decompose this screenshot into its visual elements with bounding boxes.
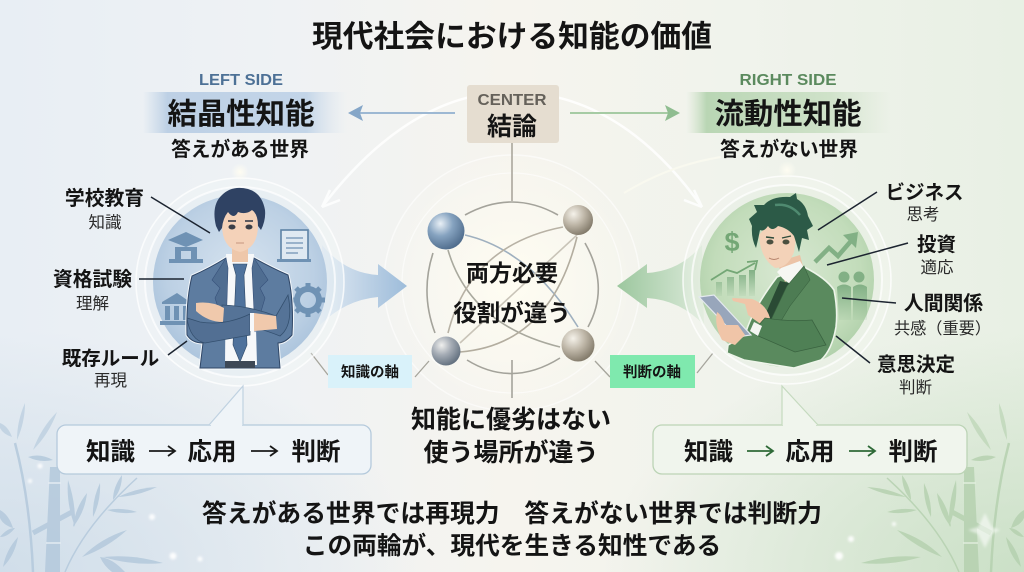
bamboo: bottom right — [861, 403, 1024, 572]
network diagram — [427, 202, 598, 398]
large decorative arcs with arrowheads — [322, 92, 721, 411]
icon: certificate — [277, 230, 311, 262]
label: knowledge axis — [328, 355, 412, 388]
label: investment: 投資 — [917, 234, 956, 256]
icon: bar chart — [711, 261, 757, 296]
label: qualification exam: 資格試験 — [53, 269, 132, 291]
panel: right heading: 流動性知能 — [715, 98, 861, 131]
center statement: 知能に優劣はない — [411, 406, 611, 434]
panel: left heading: LEFT SIDE — [199, 72, 283, 89]
panel: right heading: 答えがない世界 — [720, 138, 858, 161]
label: relationships — [894, 293, 991, 338]
label: investment: 適応 — [920, 258, 954, 277]
icon: rising arrow — [815, 232, 858, 262]
arrow — [251, 446, 277, 456]
bottom summary — [202, 499, 822, 560]
panel: left heading: 結晶性知能 — [168, 98, 314, 131]
arrow — [747, 446, 773, 456]
label: judgment axis — [610, 355, 695, 388]
panel: left flow box: 応用 — [188, 438, 236, 466]
glow spot on ring — [231, 163, 249, 181]
label: investment — [917, 234, 956, 277]
glow spot on ring — [778, 161, 796, 179]
label: existing rules: 再現 — [94, 372, 128, 390]
panel: left heading: 答えがある世界 — [171, 138, 309, 161]
label: school education: 学校教育 — [65, 187, 144, 210]
label: business: 思考 — [906, 205, 940, 224]
label: judgment axis: 判断の軸 — [623, 363, 681, 381]
label: decision making: 判断 — [899, 378, 932, 397]
panel: left flow box: 判断 — [292, 438, 340, 466]
icon: people — [837, 272, 867, 320]
node: beige upper — [563, 205, 593, 235]
person: man using tablet — [699, 193, 837, 368]
title: 現代社会における知能の価値 — [312, 20, 712, 54]
central glow — [377, 148, 647, 418]
connector: right circle funnel and arrow — [617, 245, 704, 325]
icon: graduation building — [168, 232, 203, 263]
panel: center conclusion — [467, 85, 559, 143]
node: blue large — [428, 212, 464, 250]
panel: right flow box: 応用 — [786, 438, 834, 466]
panel: right heading: RIGHT SIDE — [740, 72, 837, 89]
panel: center conclusion: CENTER — [478, 92, 547, 109]
center text — [453, 260, 571, 326]
label: existing rules — [62, 348, 159, 390]
label: relationships: 人間関係 — [904, 293, 983, 315]
panel: right flow box: 判断 — [888, 438, 938, 466]
panel: right heading — [686, 72, 891, 161]
bottom summary: この両輪が、現代を生きる知性である — [303, 531, 721, 560]
center text: 役割が違う — [453, 299, 571, 326]
bamboo: bottom left — [0, 403, 163, 572]
panel: center conclusion: 結論 — [487, 113, 537, 141]
panel: left heading — [143, 72, 347, 161]
left callouts — [53, 187, 210, 390]
arrow — [849, 446, 875, 456]
panel: right flow box: 知識 — [684, 438, 733, 466]
label: school education: 知識 — [88, 213, 122, 232]
node: beige lower — [562, 328, 594, 362]
left circle with person — [136, 163, 344, 386]
sparkles — [28, 464, 1000, 562]
panel: left flow box: 知識 — [86, 438, 135, 466]
label: business: ビジネス — [885, 182, 964, 204]
bottom summary: 答えがある世界では再現力 答えがない世界では判断力 — [202, 499, 822, 528]
person: businessman arms crossed — [187, 188, 292, 368]
arrow — [149, 446, 175, 456]
vertical connector: conclusion to network — [511, 143, 513, 201]
icon: gear — [291, 283, 325, 317]
label: existing rules: 既存ルール — [62, 348, 159, 370]
icon: dollar: $ — [724, 227, 740, 257]
arrow: center to left — [348, 105, 455, 121]
center statement — [411, 406, 611, 467]
label: school education — [65, 187, 144, 232]
label: decision making — [877, 354, 955, 397]
label connectors — [311, 353, 713, 377]
panel: right flow box — [653, 386, 967, 474]
center statement: 使う場所が違う — [423, 438, 599, 467]
panel: left flow box — [57, 386, 371, 474]
label: decision making: 意思決定 — [877, 354, 955, 376]
right circle with person — [683, 161, 891, 384]
arrow: center to right — [570, 105, 680, 121]
icon: bank — [160, 293, 190, 325]
label: knowledge axis: 知識の軸 — [341, 363, 399, 381]
center text: 両方必要 — [466, 260, 558, 286]
label: relationships: 共感（重要） — [894, 320, 991, 338]
label: qualification exam: 理解 — [76, 294, 109, 313]
label: business — [885, 182, 964, 224]
right callouts — [818, 182, 991, 397]
node: grey small — [432, 336, 460, 366]
label: qualification exam — [53, 269, 132, 313]
connector: left circle funnel and arrow — [320, 245, 407, 325]
